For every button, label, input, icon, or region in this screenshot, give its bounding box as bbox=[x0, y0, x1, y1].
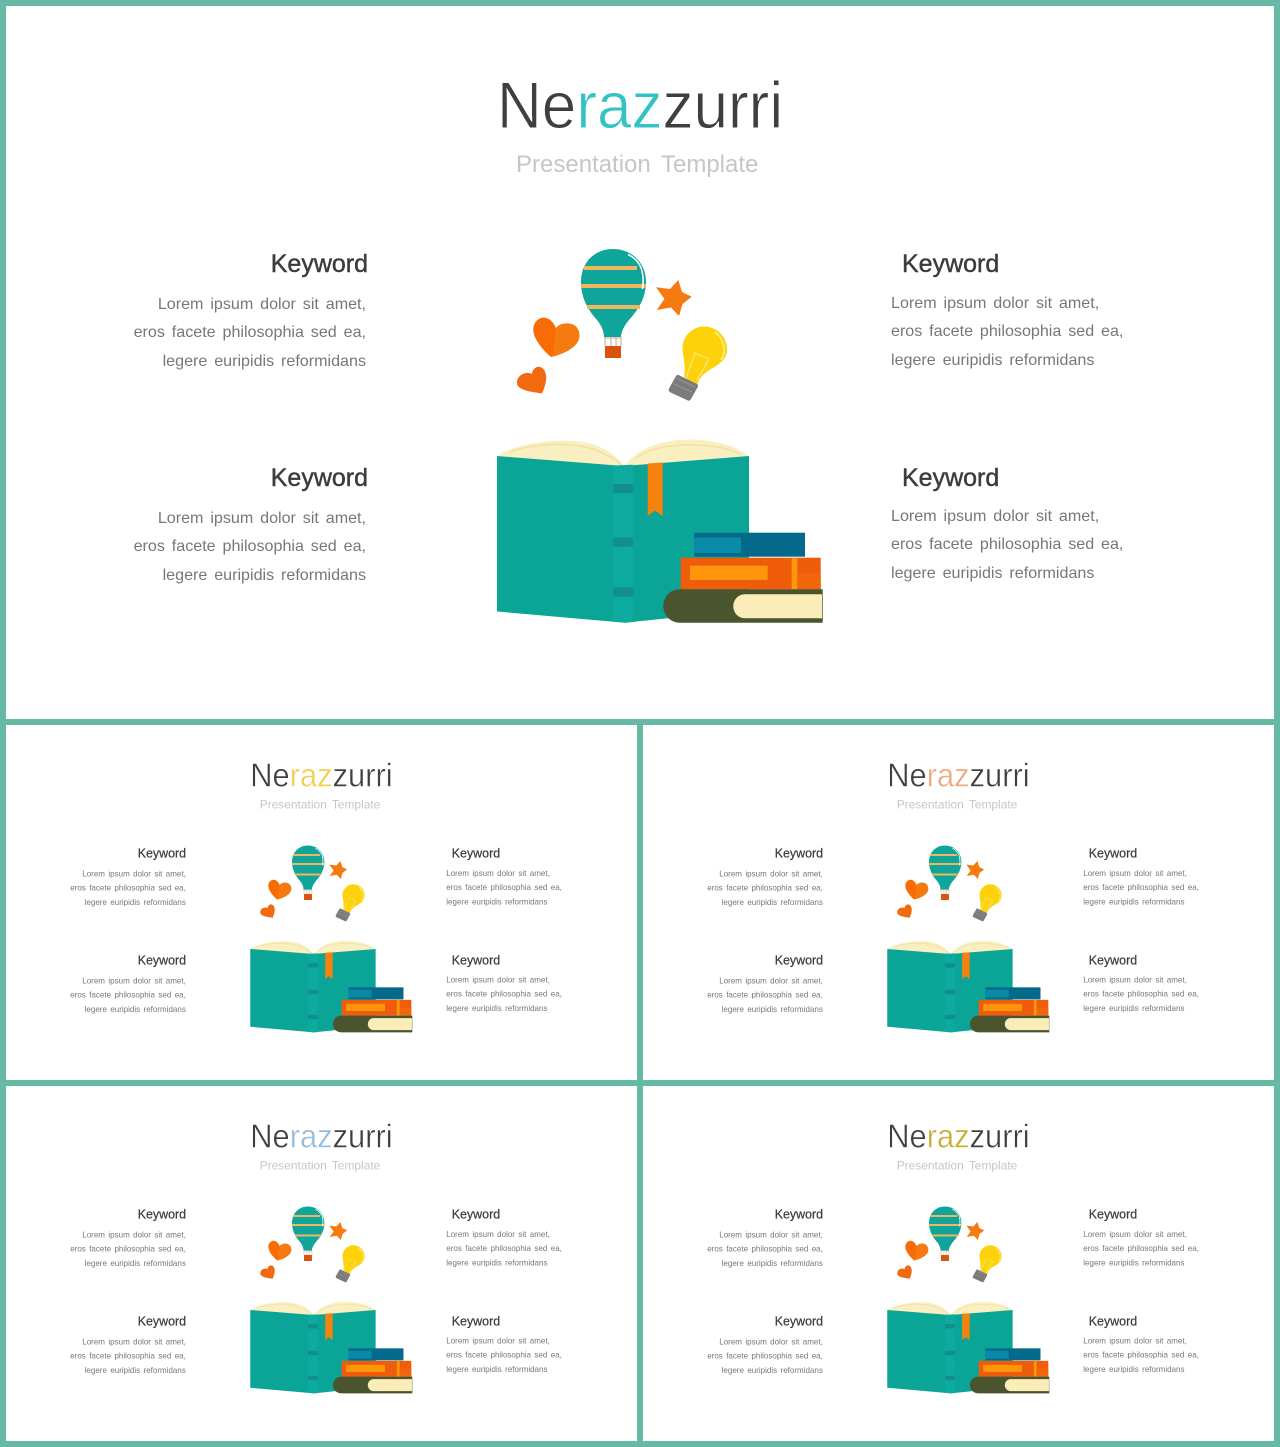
illustration: books and ideas bbox=[497, 249, 823, 623]
body text: legere euripidis reformidans bbox=[446, 1258, 547, 1267]
icon: small heart bbox=[897, 904, 912, 918]
text block: bottom right bbox=[1083, 1314, 1212, 1376]
body text: eros facete philosophia sed ea, bbox=[134, 537, 366, 555]
icon: open book bbox=[887, 1302, 1013, 1393]
body text bbox=[707, 869, 823, 907]
heading: Keyword bbox=[1089, 1314, 1137, 1328]
heading: Keyword bbox=[1089, 954, 1137, 968]
title: Nerazzurri bbox=[887, 1117, 1030, 1154]
body text bbox=[70, 1230, 186, 1268]
subtitle: Presentation Template bbox=[260, 1159, 380, 1172]
body text: eros facete philosophia sed ea, bbox=[1083, 990, 1199, 999]
body text: eros facete philosophia sed ea, bbox=[446, 990, 562, 999]
heading: Keyword bbox=[902, 464, 999, 492]
icon: book stack bbox=[333, 1348, 412, 1393]
body text: Lorem ipsum dolor sit amet, bbox=[719, 1337, 823, 1346]
text block: bottom right bbox=[446, 1314, 562, 1374]
icon: open book bbox=[887, 941, 1013, 1032]
body text: Lorem ipsum dolor sit amet, bbox=[1083, 1336, 1187, 1345]
heading: Keyword bbox=[1089, 846, 1137, 860]
text block: top right bbox=[446, 846, 562, 906]
subtitle: Presentation Template bbox=[516, 150, 758, 178]
body text: Lorem ipsum dolor sit amet, bbox=[158, 295, 366, 313]
body text: legere euripidis reformidans bbox=[163, 352, 366, 370]
body text bbox=[446, 975, 562, 1013]
body text bbox=[707, 1228, 823, 1271]
body text: legere euripidis reformidans bbox=[85, 1005, 186, 1014]
text block: top right bbox=[446, 1208, 562, 1267]
text block: top right bbox=[1083, 1207, 1212, 1270]
body text: legere euripidis reformidans bbox=[722, 898, 823, 907]
body text: legere euripidis reformidans bbox=[891, 564, 1094, 582]
body text: eros facete philosophia sed ea, bbox=[707, 1352, 823, 1361]
heading: Keyword bbox=[775, 846, 823, 860]
text block: top left bbox=[70, 1208, 186, 1268]
body text: Lorem ipsum dolor sit amet, bbox=[82, 869, 186, 878]
icon: light bulb bbox=[336, 1245, 365, 1282]
icon: light bulb bbox=[336, 884, 365, 921]
body text: Lorem ipsum dolor sit amet, bbox=[446, 1336, 550, 1345]
icon: star bbox=[329, 861, 347, 879]
body text: Lorem ipsum dolor sit amet, bbox=[719, 869, 823, 878]
text block: bottom left bbox=[707, 954, 823, 1014]
icon: large heart bbox=[533, 318, 579, 357]
icon: light bulb bbox=[669, 326, 727, 401]
body text: Lorem ipsum dolor sit amet, bbox=[82, 1230, 186, 1239]
subtitle: Presentation Template bbox=[260, 798, 380, 811]
body text bbox=[1083, 1227, 1199, 1270]
body text bbox=[1083, 975, 1199, 1013]
heading: Keyword bbox=[271, 464, 368, 492]
text block: top right bbox=[1083, 846, 1199, 906]
heading: Keyword bbox=[1089, 1208, 1137, 1222]
body text: Lorem ipsum dolor sit amet, bbox=[719, 1230, 823, 1239]
heading: Keyword bbox=[902, 250, 999, 278]
body text bbox=[70, 1337, 186, 1375]
icon: star bbox=[329, 1222, 347, 1240]
panel: main slide bbox=[6, 6, 1274, 719]
body text: legere euripidis reformidans bbox=[163, 566, 366, 584]
icon: large heart bbox=[268, 1241, 291, 1260]
icon: large heart bbox=[905, 1241, 928, 1260]
body text: Lorem ipsum dolor sit amet, bbox=[82, 976, 186, 985]
icon: book stack bbox=[333, 987, 412, 1032]
text block: bottom right bbox=[1083, 954, 1199, 1013]
body text: legere euripidis reformidans bbox=[446, 1004, 547, 1013]
title: Nerazzurri bbox=[887, 756, 1030, 793]
body text: legere euripidis reformidans bbox=[1083, 897, 1184, 906]
text block: bottom right bbox=[891, 464, 1123, 582]
body text: Lorem ipsum dolor sit amet, bbox=[446, 869, 550, 878]
body text bbox=[134, 509, 366, 584]
icon: star bbox=[656, 280, 692, 316]
illustration: books and ideas bbox=[640, 1082, 1277, 1442]
icon: hot air balloon bbox=[292, 846, 324, 900]
text block: top left bbox=[134, 250, 368, 370]
body text bbox=[134, 295, 366, 370]
heading: Keyword bbox=[452, 846, 500, 860]
body text: Lorem ipsum dolor sit amet, bbox=[891, 507, 1099, 525]
body text: Lorem ipsum dolor sit amet, bbox=[446, 1230, 550, 1239]
body text bbox=[70, 869, 186, 907]
body text bbox=[1083, 1334, 1199, 1377]
text block: bottom left bbox=[70, 954, 186, 1014]
illustration: books and ideas bbox=[250, 1206, 412, 1394]
body text: Lorem ipsum dolor sit amet, bbox=[158, 509, 366, 527]
body text: eros facete philosophia sed ea, bbox=[446, 883, 562, 892]
icon: open book bbox=[250, 1302, 376, 1393]
icon: open book bbox=[497, 440, 749, 623]
icon: light bulb bbox=[973, 1245, 1002, 1282]
subtitle: Presentation Template bbox=[897, 1159, 1017, 1172]
heading: Keyword bbox=[775, 954, 823, 968]
heading: Keyword bbox=[138, 1208, 186, 1222]
body text bbox=[1083, 869, 1199, 906]
body text: legere euripidis reformidans bbox=[722, 1366, 823, 1375]
heading: Keyword bbox=[271, 250, 368, 278]
icon: small heart bbox=[517, 367, 546, 394]
icon: large heart bbox=[268, 880, 291, 900]
text block: top left bbox=[707, 846, 823, 907]
body text bbox=[891, 507, 1123, 582]
heading: Keyword bbox=[138, 846, 186, 860]
body text bbox=[446, 869, 562, 906]
body text bbox=[446, 1230, 562, 1267]
icon: small heart bbox=[260, 904, 275, 918]
icon: book stack bbox=[663, 533, 823, 623]
body text: eros facete philosophia sed ea, bbox=[707, 1245, 823, 1254]
icon: hot air balloon bbox=[292, 1206, 324, 1261]
text block: bottom left bbox=[134, 464, 368, 584]
title: Nerazzurri bbox=[497, 68, 783, 142]
body text: eros facete philosophia sed ea, bbox=[891, 535, 1123, 553]
icon: star bbox=[966, 1222, 984, 1240]
body text: eros facete philosophia sed ea, bbox=[707, 991, 823, 1000]
heading: Keyword bbox=[138, 1314, 186, 1328]
illustration: books and ideas bbox=[887, 846, 1050, 1032]
body text: legere euripidis reformidans bbox=[1083, 1365, 1184, 1374]
title: Nerazzurri bbox=[250, 756, 393, 793]
body text: legere euripidis reformidans bbox=[722, 1005, 823, 1014]
body text: legere euripidis reformidans bbox=[446, 1365, 547, 1374]
illustration: books and ideas bbox=[250, 846, 412, 1032]
body text: legere euripidis reformidans bbox=[85, 898, 186, 907]
icon: hot air balloon bbox=[929, 846, 961, 900]
body text: eros facete philosophia sed ea, bbox=[707, 884, 823, 893]
heading: Keyword bbox=[138, 954, 186, 968]
icon: book stack bbox=[970, 1348, 1049, 1393]
body text bbox=[891, 294, 1123, 369]
body text: legere euripidis reformidans bbox=[446, 897, 547, 906]
body text: legere euripidis reformidans bbox=[722, 1259, 823, 1268]
body text: eros facete philosophia sed ea, bbox=[70, 1245, 186, 1254]
body text: Lorem ipsum dolor sit amet, bbox=[719, 976, 823, 985]
text block: bottom left bbox=[70, 1314, 186, 1375]
body text: eros facete philosophia sed ea, bbox=[134, 323, 366, 341]
body text: eros facete philosophia sed ea, bbox=[70, 1352, 186, 1361]
panel: gold accent slide bbox=[643, 1086, 1274, 1441]
body text bbox=[707, 1335, 823, 1378]
body text: Lorem ipsum dolor sit amet, bbox=[1083, 975, 1187, 984]
body text: eros facete philosophia sed ea, bbox=[446, 1351, 562, 1360]
icon: hot air balloon bbox=[581, 249, 646, 358]
body text: eros facete philosophia sed ea, bbox=[1083, 1244, 1199, 1253]
icon: book stack bbox=[970, 987, 1049, 1032]
icon: open book bbox=[250, 941, 376, 1032]
icon: star bbox=[966, 861, 984, 879]
body text: legere euripidis reformidans bbox=[85, 1366, 186, 1375]
icon: hot air balloon bbox=[929, 1206, 961, 1261]
body text: Lorem ipsum dolor sit amet, bbox=[446, 975, 550, 984]
body text bbox=[446, 1336, 562, 1374]
subtitle: Presentation Template bbox=[897, 798, 1017, 811]
heading: Keyword bbox=[775, 1314, 823, 1328]
body text: eros facete philosophia sed ea, bbox=[1083, 1351, 1199, 1360]
body text: legere euripidis reformidans bbox=[1083, 1004, 1184, 1013]
body text: Lorem ipsum dolor sit amet, bbox=[1083, 1230, 1187, 1239]
body text: eros facete philosophia sed ea, bbox=[70, 991, 186, 1000]
body text: legere euripidis reformidans bbox=[1083, 1258, 1184, 1267]
body text: Lorem ipsum dolor sit amet, bbox=[891, 294, 1099, 312]
panel: blue accent slide bbox=[6, 1086, 637, 1441]
icon: large heart bbox=[905, 880, 928, 900]
body text: legere euripidis reformidans bbox=[891, 351, 1094, 369]
panel: orange accent slide bbox=[643, 725, 1274, 1080]
text block: top right bbox=[891, 250, 1123, 369]
heading: Keyword bbox=[452, 1208, 500, 1222]
icon: small heart bbox=[897, 1265, 912, 1279]
icon: small heart bbox=[260, 1265, 275, 1279]
body text bbox=[70, 976, 186, 1014]
text block: bottom right bbox=[446, 954, 562, 1013]
text block: top left bbox=[695, 1207, 823, 1270]
body text: Lorem ipsum dolor sit amet, bbox=[82, 1337, 186, 1346]
title: Nerazzurri bbox=[250, 1117, 393, 1154]
heading: Keyword bbox=[452, 954, 500, 968]
text block: top left bbox=[70, 846, 186, 907]
panel: yellow accent slide bbox=[6, 725, 637, 1080]
body text: eros facete philosophia sed ea, bbox=[70, 884, 186, 893]
body text: Lorem ipsum dolor sit amet, bbox=[1083, 869, 1187, 878]
body text: eros facete philosophia sed ea, bbox=[891, 322, 1123, 340]
body text bbox=[707, 976, 823, 1014]
heading: Keyword bbox=[452, 1314, 500, 1328]
body text: eros facete philosophia sed ea, bbox=[446, 1244, 562, 1253]
icon: light bulb bbox=[973, 884, 1002, 921]
heading: Keyword bbox=[775, 1208, 823, 1222]
body text: eros facete philosophia sed ea, bbox=[1083, 883, 1199, 892]
text block: bottom left bbox=[695, 1314, 823, 1376]
body text: legere euripidis reformidans bbox=[85, 1259, 186, 1268]
